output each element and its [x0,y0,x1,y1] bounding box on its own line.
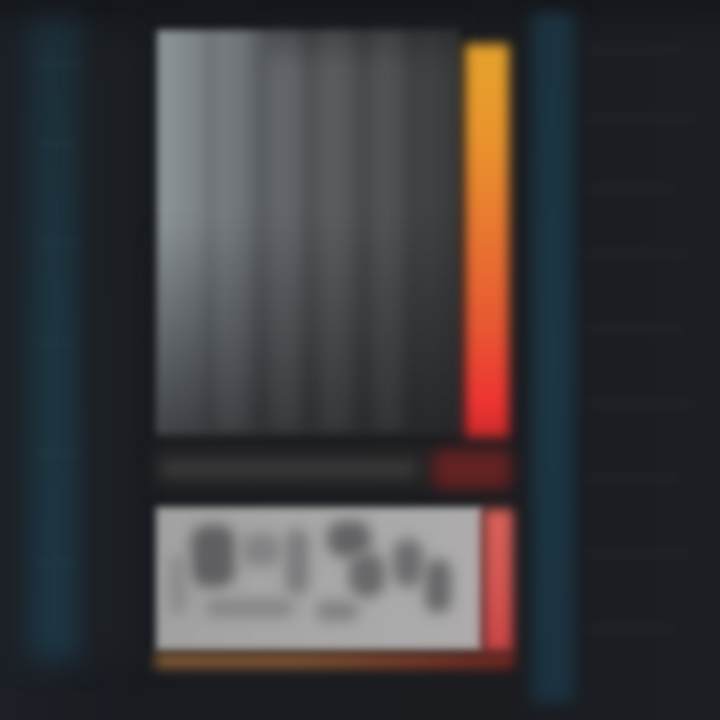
left blue band [29,20,83,660]
left text block [35,40,135,660]
label strip under chart [154,440,520,498]
top dark vignette [0,0,720,16]
table red column [483,509,513,653]
panel: vertical bar chart area [152,24,461,440]
right text block [525,5,710,710]
chart top fade [265,22,465,68]
chart fade toward bottom [149,218,465,448]
vertical stripes [155,0,460,440]
strip labels [163,463,413,475]
table background [156,507,482,651]
left secondary band [91,40,131,660]
table dark smudges [166,514,459,627]
strip red end [433,449,511,489]
strip background [155,449,430,487]
panel: right column [526,8,579,708]
table bottom orange line [155,654,515,668]
right blue band [532,13,574,703]
panel: bottom table [148,500,522,676]
panel: left column [20,13,88,668]
gradient bar: orange to red [465,44,509,438]
chart background gradient [157,30,459,435]
